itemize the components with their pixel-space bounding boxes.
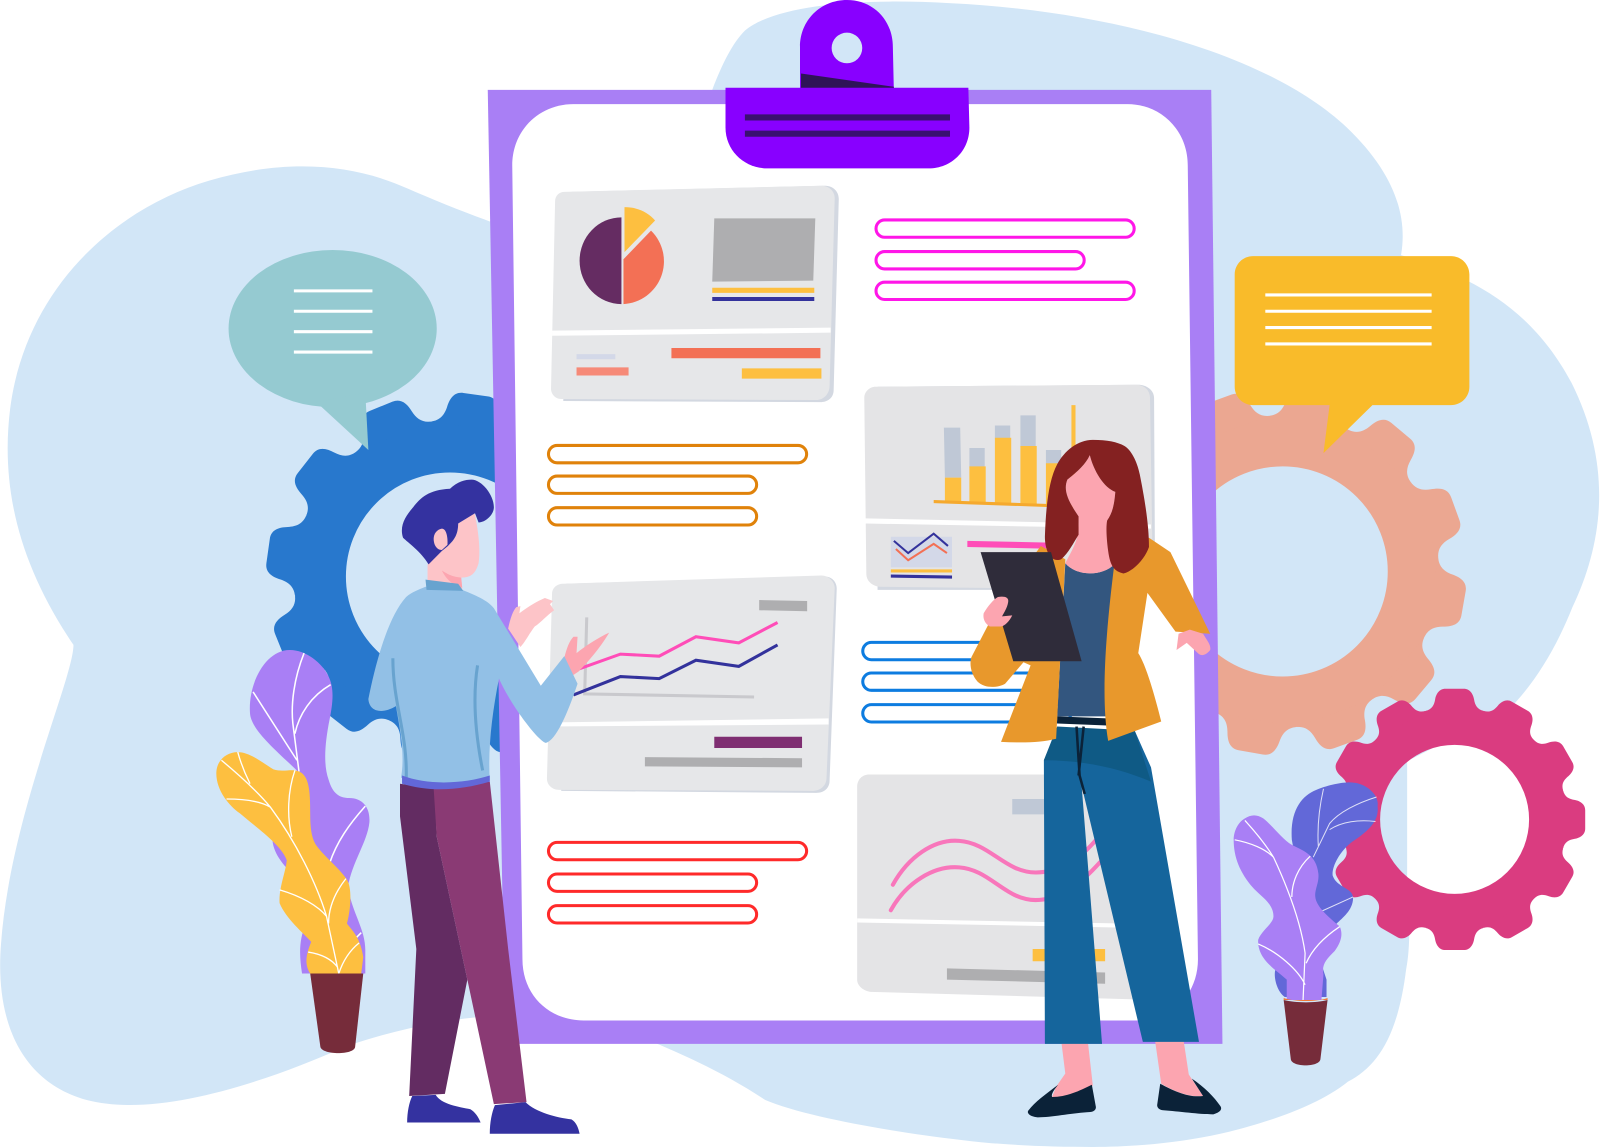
shoes bbox=[407, 1095, 580, 1134]
jacket bbox=[970, 546, 1065, 742]
far hand bbox=[508, 598, 554, 647]
shirt bbox=[368, 587, 578, 788]
pants bbox=[400, 776, 527, 1104]
ear bbox=[434, 529, 448, 550]
hair bbox=[402, 480, 494, 564]
left plant bbox=[216, 650, 369, 1053]
yellow leaf veins bbox=[221, 752, 359, 974]
drawstring bbox=[1077, 727, 1085, 794]
indigo leaf veins bbox=[1313, 789, 1377, 911]
shoes bbox=[1028, 1079, 1221, 1117]
purple leaf veins bbox=[253, 653, 365, 940]
hair bbox=[1045, 440, 1149, 574]
bar block bbox=[712, 218, 815, 301]
clipboard board bbox=[488, 90, 1222, 1044]
orange pill list bbox=[548, 445, 807, 525]
yellow leaves bbox=[216, 752, 363, 974]
pink pill list bbox=[876, 220, 1134, 300]
teal speech bubble bbox=[229, 250, 437, 450]
peach gear bbox=[1095, 384, 1471, 759]
wave lines bbox=[891, 839, 1100, 910]
pot bbox=[310, 974, 363, 1053]
collar bbox=[426, 580, 463, 591]
hand right bbox=[1177, 630, 1210, 655]
bars bbox=[934, 405, 1082, 508]
legs skin bbox=[1052, 1041, 1203, 1097]
panel: line chart card bbox=[547, 576, 837, 793]
blue pill list bbox=[863, 642, 1121, 722]
purple leaves bbox=[250, 650, 369, 974]
pot bbox=[1284, 998, 1328, 1001]
belt bbox=[1057, 716, 1107, 726]
neck and face bbox=[1065, 455, 1115, 573]
right plant bbox=[1234, 782, 1378, 1065]
yellow speech bubble bbox=[1235, 256, 1469, 453]
indigo leaves bbox=[1275, 782, 1378, 997]
man presenting bbox=[368, 480, 609, 1134]
neck shadow bbox=[442, 570, 462, 588]
purple leaves bbox=[1234, 815, 1341, 1000]
held clipboard bbox=[981, 552, 1082, 661]
purple leaf veins bbox=[1235, 820, 1340, 1000]
woman with clipboard bbox=[970, 440, 1221, 1117]
mini line chart bbox=[891, 534, 952, 579]
neck and face bbox=[428, 513, 479, 590]
line chart bbox=[573, 617, 778, 697]
blue gear bbox=[262, 389, 638, 764]
panel: pie chart card bbox=[551, 186, 839, 402]
pie chart bbox=[580, 207, 664, 304]
pink gear bbox=[1324, 689, 1585, 950]
near hand bbox=[564, 633, 609, 678]
red pill list bbox=[548, 842, 807, 923]
clipboard clip bbox=[726, 0, 969, 168]
panel: bar chart card bbox=[864, 385, 1155, 590]
shirt folds bbox=[393, 658, 483, 781]
top bbox=[1057, 563, 1114, 716]
hand left bbox=[983, 597, 1012, 627]
jeans bbox=[1044, 729, 1199, 1044]
panel: wave chart card bbox=[857, 775, 1158, 1000]
